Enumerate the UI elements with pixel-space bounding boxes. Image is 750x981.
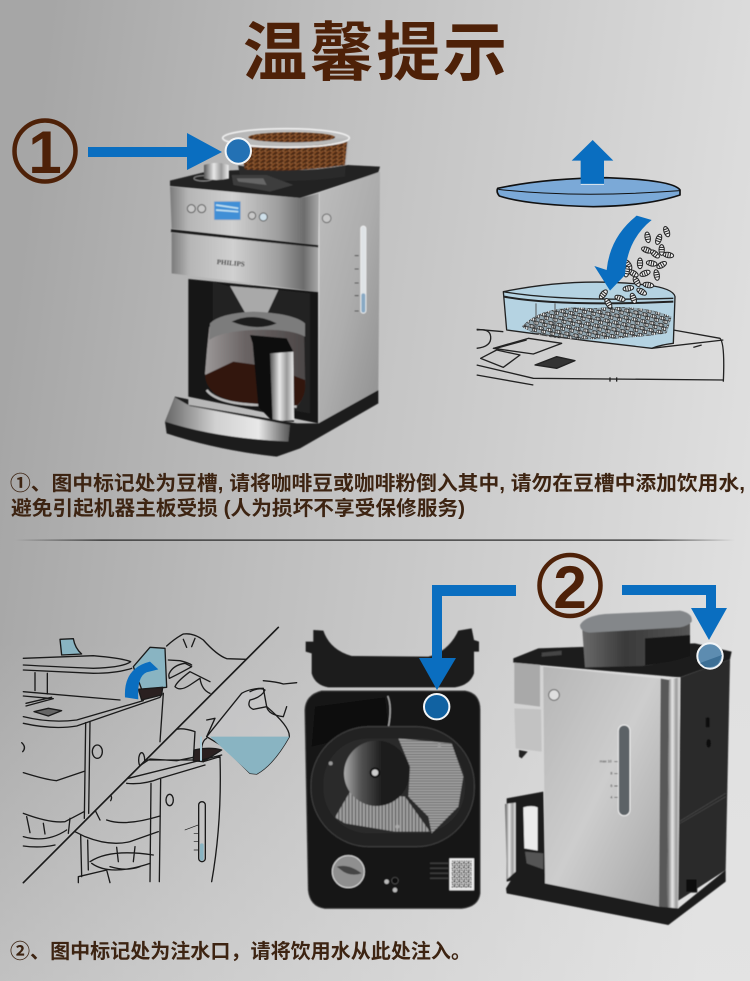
water gauge: max 10 <box>600 760 612 764</box>
description step 1: 避免引起机器主板受损 (人为损坏不享受保修服务) <box>11 497 465 520</box>
front steel seen from the side <box>514 663 540 707</box>
top plate <box>513 643 732 677</box>
photo: coffee machine front <box>165 129 380 457</box>
water gauge: 8 <box>610 772 612 776</box>
carafe handle <box>505 792 545 882</box>
marker circle on hopper <box>226 138 251 164</box>
right side panel <box>318 172 380 423</box>
water jug <box>201 681 297 774</box>
blue arrow curved <box>125 662 158 699</box>
brand: PHILIPS <box>216 258 245 268</box>
front lower steel panel <box>172 233 318 292</box>
step 2 number badge <box>540 554 600 621</box>
water gauge <box>355 226 366 313</box>
body <box>305 691 480 908</box>
illustration: opening lid and pouring beans <box>477 140 724 385</box>
buttons <box>187 205 267 221</box>
step 2 number badge: 2 <box>553 554 587 621</box>
title: 温馨提示 <box>243 17 507 89</box>
step 1 number badge: 1 <box>28 119 62 186</box>
water gauge: 6 <box>610 784 612 788</box>
arrow into water inlet <box>622 585 727 640</box>
base <box>506 870 726 925</box>
arrow pointing to hopper <box>88 133 222 170</box>
falling beans <box>598 226 674 309</box>
description step 1 <box>10 471 745 520</box>
steel side panel <box>543 667 661 907</box>
seam <box>171 231 318 247</box>
disk <box>344 741 409 806</box>
lid in hand <box>133 647 167 689</box>
water gauge <box>600 725 630 816</box>
photo: coffee machine rear <box>505 611 732 925</box>
oval basin <box>311 727 474 847</box>
knob <box>332 856 364 888</box>
step 1 number badge <box>14 119 76 186</box>
up arrow <box>572 140 613 184</box>
base <box>165 390 378 457</box>
cavity <box>188 279 318 423</box>
divider diagonal <box>23 627 278 883</box>
photo: open lid and reservoir <box>305 628 480 908</box>
top controls <box>194 163 293 192</box>
display <box>214 201 241 220</box>
power button <box>549 690 559 700</box>
right machine <box>75 729 222 883</box>
left machine <box>22 634 246 847</box>
lid <box>497 178 680 207</box>
description step 1: ①、图中标记处为豆槽, 请将咖啡豆或咖啡粉倒入其中, 请勿在豆槽中添加饮用水, <box>10 471 745 495</box>
description step 2: ②、图中标记处为注水口，请将饮用水从此处注入。 <box>10 940 471 963</box>
machine outline <box>477 329 724 385</box>
bean hopper <box>223 129 349 181</box>
carafe <box>205 312 305 422</box>
lid <box>306 628 479 687</box>
marker circle on reservoir <box>424 694 449 719</box>
hand <box>167 634 246 693</box>
arrow into reservoir <box>419 585 516 690</box>
QR label <box>449 858 474 890</box>
front upper steel panel <box>170 187 319 245</box>
water gauge: 4 <box>610 795 612 799</box>
machine top plate <box>170 165 380 198</box>
curved arrow <box>594 216 652 291</box>
marker circle on water inlet <box>697 643 723 669</box>
brew cone <box>230 286 278 315</box>
hopper <box>580 611 692 667</box>
back panel <box>678 659 730 901</box>
illustration: filling water <box>22 627 297 883</box>
hopper <box>503 282 675 348</box>
